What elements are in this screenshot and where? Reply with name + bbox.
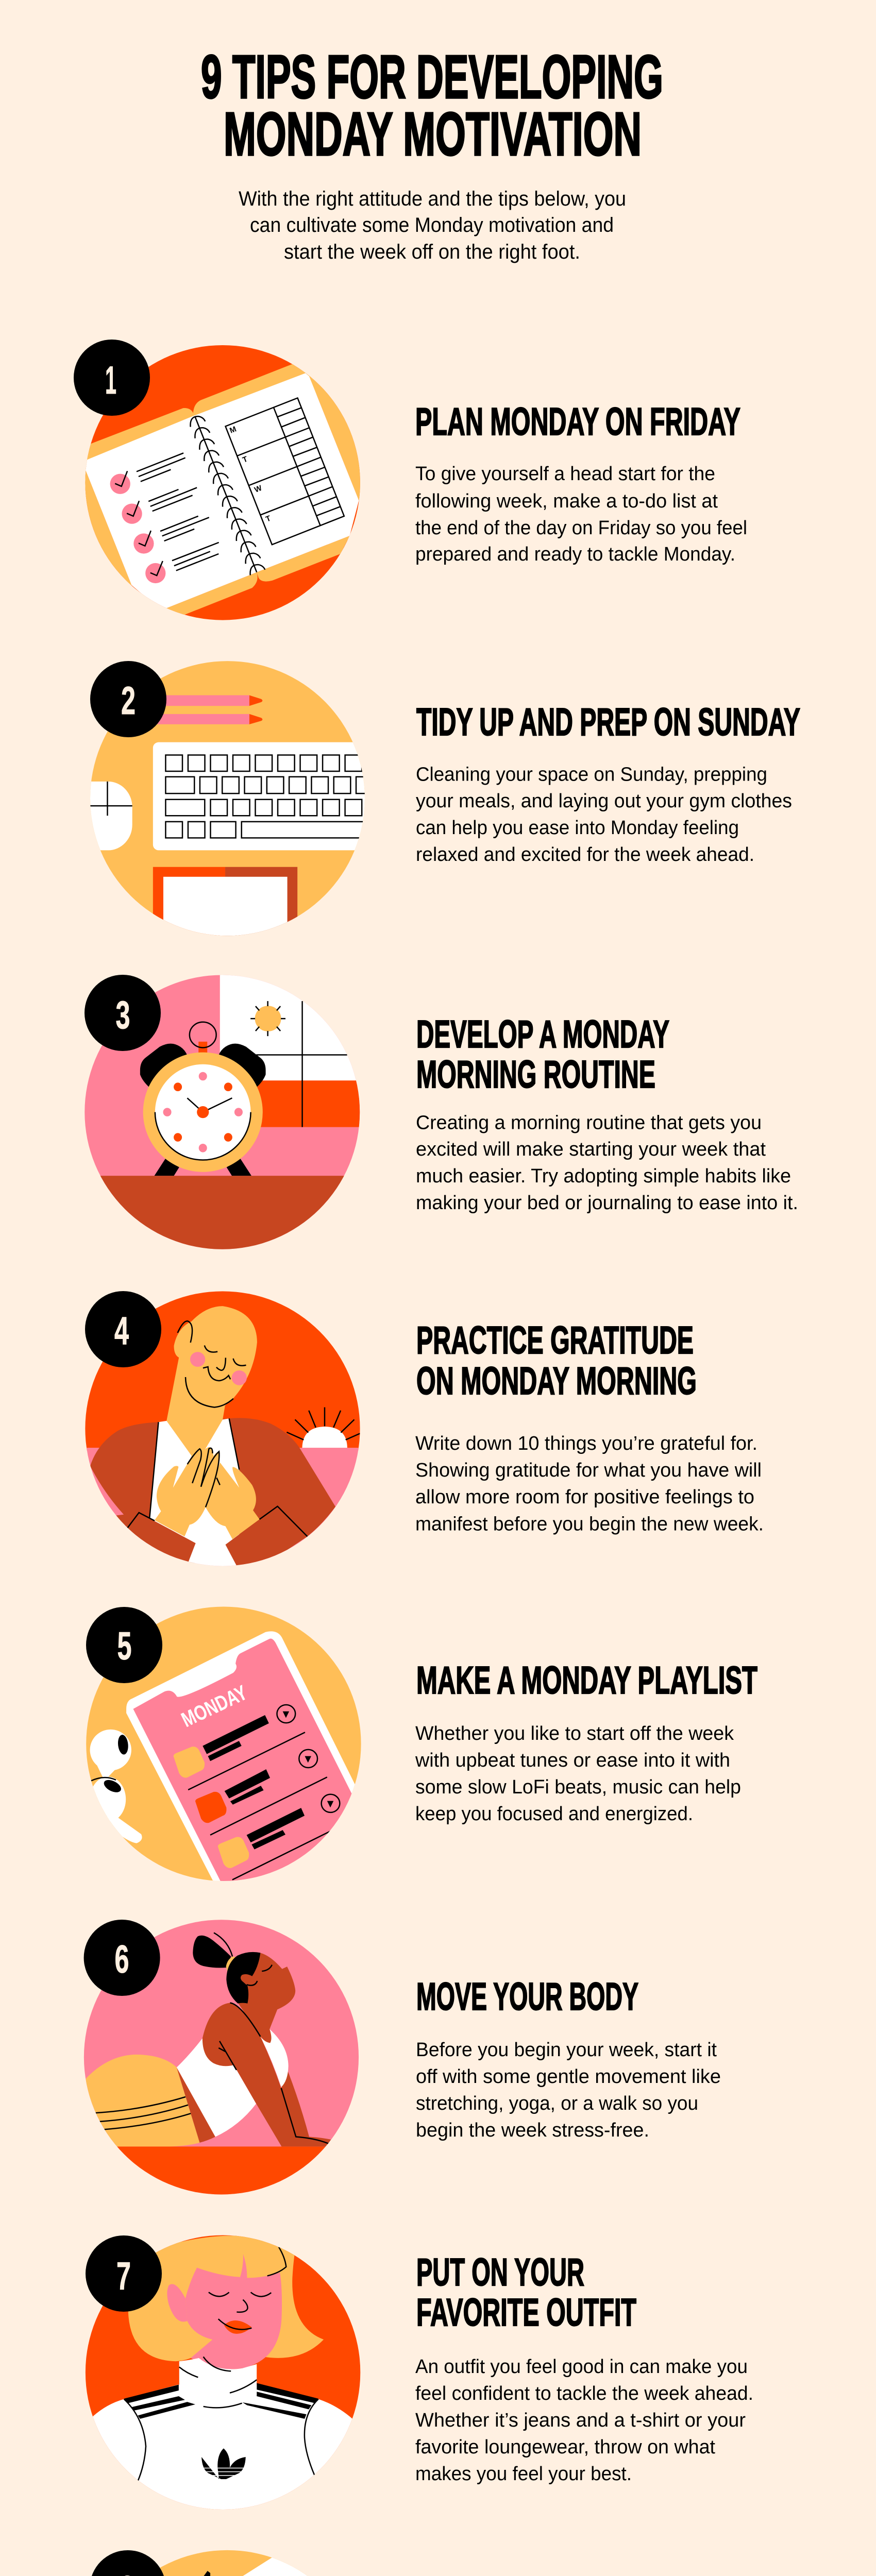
tip 5 body: Whether you like to start off the week <box>415 1723 734 1744</box>
tip 7 body: An outfit you feel good in can make you <box>415 2356 748 2378</box>
tip 4 heading: ON MONDAY MORNING <box>416 1359 697 1402</box>
tip 3 panel <box>81 968 798 1257</box>
tip 6 heading: MOVE YOUR BODY <box>416 1975 638 2018</box>
illustration: phone playlist and earbuds <box>86 1606 361 1881</box>
tip 5 body <box>415 1723 741 1825</box>
tip 1 body: the end of the day on Friday so you feel <box>415 517 747 539</box>
tip 3 body <box>416 1112 798 1214</box>
number badge 1: 1 <box>105 359 116 402</box>
number badge 8 <box>90 2550 166 2576</box>
illustration: person practicing gratitude <box>85 1291 360 1566</box>
tip 5 body: some slow LoFi beats, music can help <box>415 1776 741 1798</box>
number badge 1 <box>74 340 150 416</box>
tip 4 body: manifest before you begin the new week. <box>415 1514 764 1535</box>
number badge 6 <box>84 1920 160 1996</box>
illustration: to-do list and pencil <box>160 2550 307 2576</box>
illustration: woman in favorite outfit <box>86 2235 361 2510</box>
tip 3 body: excited will make starting your week that <box>416 1139 766 1160</box>
tip 7 heading <box>416 2250 636 2334</box>
tip 1 body <box>415 463 747 565</box>
tip 7 panel <box>86 2235 752 2510</box>
tip 7 heading: FAVORITE OUTFIT <box>416 2291 636 2334</box>
number badge 6: 6 <box>114 1938 129 1981</box>
number badge 5: 5 <box>117 1624 132 1668</box>
tip 6 body: stretching, yoga, or a walk so you <box>416 2093 698 2114</box>
tip 7 body: makes you feel your best. <box>415 2463 632 2485</box>
tip 2 panel <box>90 661 801 936</box>
illustration: alarm clock <box>81 968 369 1257</box>
tip 5 panel <box>86 1606 757 1881</box>
tip 4 body: Showing gratitude for what you have will <box>415 1460 762 1481</box>
number badge 4: 4 <box>114 1309 129 1353</box>
number badge 7: 7 <box>116 2255 131 2298</box>
tip 7 body: feel confident to tackle the week ahead. <box>415 2383 753 2404</box>
illustration: woman stretching <box>83 1920 359 2195</box>
tip 7 body: favorite loungewear, throw on what <box>415 2436 715 2458</box>
tip 3 heading: MORNING ROUTINE <box>416 1053 655 1096</box>
intro text: can cultivate some Monday motivation and <box>250 214 614 236</box>
tip 6 body: off with some gentle movement like <box>416 2066 721 2088</box>
tip 7 body: Whether it’s jeans and a t-shirt or your <box>415 2410 746 2431</box>
tip 4 heading: PRACTICE GRATITUDE <box>416 1318 694 1362</box>
tip 6 body <box>416 2039 721 2141</box>
tip 7 heading: PUT ON YOUR <box>416 2250 584 2294</box>
illustration: planner notebook: T <box>264 514 272 524</box>
tip 1 body: To give yourself a head start for the <box>415 463 715 485</box>
illustration: planner notebook <box>85 345 360 620</box>
tip 5 body: keep you focused and energized. <box>415 1803 693 1825</box>
tip 3 heading <box>416 1012 669 1096</box>
tip 7 body <box>415 2356 753 2485</box>
tip 6 body: Before you begin your week, start it <box>416 2039 717 2061</box>
tip 4 heading <box>416 1318 697 1402</box>
illustration: planner notebook: W <box>253 483 263 495</box>
tip 4 body <box>415 1433 764 1535</box>
illustration: tidy desk <box>90 661 365 936</box>
number badge 3: 3 <box>115 993 130 1037</box>
tip 3 body: much easier. Try adopting simple habits like <box>416 1165 791 1187</box>
number badge 2 <box>90 661 166 737</box>
tip 8 panel <box>92 2550 307 2576</box>
intro text: With the right attitude and the tips below, you <box>239 188 626 210</box>
tip 3 heading: DEVELOP A MONDAY <box>416 1012 669 1056</box>
tip 2 body <box>416 764 792 866</box>
intro text <box>239 188 626 263</box>
title <box>201 43 663 168</box>
tip 1 body: prepared and ready to tackle Monday. <box>415 544 735 565</box>
tip 2 body: can help you ease into Monday feeling <box>416 817 739 839</box>
tip 2 body: Cleaning your space on Sunday, prepping <box>416 764 767 785</box>
tip 4 panel <box>77 1288 764 1574</box>
number badge 3 <box>85 975 161 1051</box>
tip 3 body: Creating a morning routine that gets you <box>416 1112 762 1133</box>
illustration: phone playlist and earbuds: MONDAY <box>178 1681 251 1732</box>
number badge 7 <box>86 2235 162 2312</box>
tip 2 body: your meals, and laying out your gym clothes <box>416 790 792 812</box>
tip 5 body: with upbeat tunes or ease into it with <box>415 1750 730 1771</box>
tip 6 panel <box>77 1911 721 2206</box>
tip 1 body: following week, make a to-do list at <box>415 490 718 512</box>
tip 2 body: relaxed and excited for the week ahead. <box>416 844 754 866</box>
intro text: start the week off on the right foot. <box>284 241 580 263</box>
tip 4 body: Write down 10 things you’re grateful for. <box>415 1433 757 1454</box>
tip 3 body: making your bed or journaling to ease into it. <box>416 1192 798 1214</box>
number badge 2: 2 <box>121 679 136 723</box>
number badge 4 <box>85 1291 161 1367</box>
tip 6 body: begin the week stress-free. <box>416 2120 649 2141</box>
number badge 5 <box>86 1607 162 1683</box>
tip 4 body: allow more room for positive feelings to <box>415 1486 754 1508</box>
title: MONDAY MOTIVATION <box>224 100 642 168</box>
illustration: planner notebook: T <box>241 455 249 465</box>
illustration: planner notebook: M <box>228 425 238 435</box>
tip 1 panel <box>74 335 747 629</box>
